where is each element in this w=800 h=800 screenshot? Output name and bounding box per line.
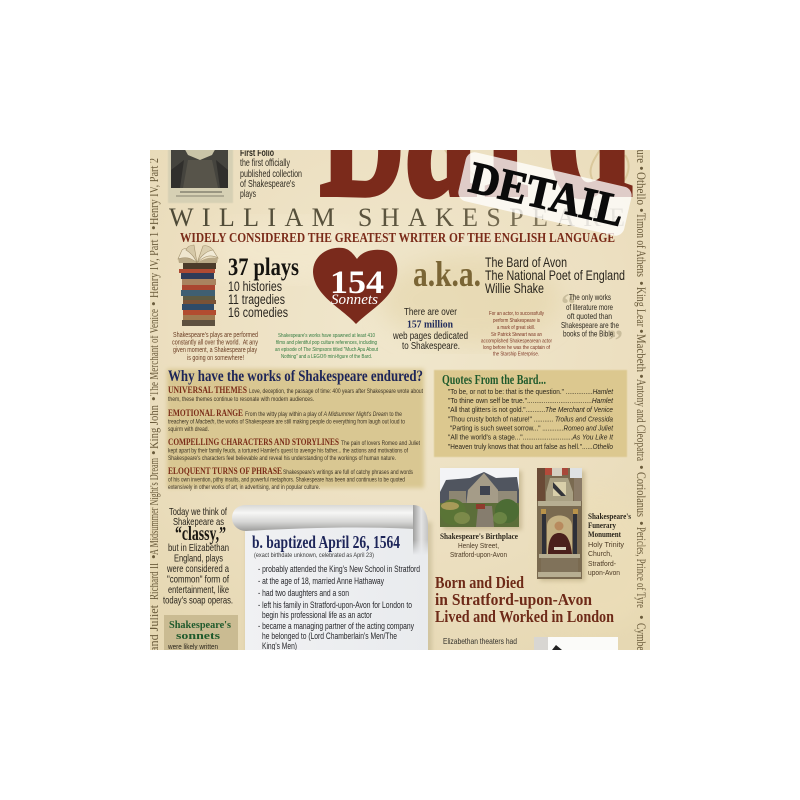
sidebar: right play titles: Antony and Cleopatra (634, 379, 649, 461)
panel: why the works endured: them, these themes continue to resonate with modern audiences. (168, 396, 314, 403)
sidebar: right play titles: • (634, 208, 649, 213)
image: Shakespeare's birthplace (440, 468, 522, 530)
panel: biography scroll: - became a managing partner of the acting company (258, 621, 414, 631)
sidebar: left play titles: A Midsummer Night's Dream (146, 458, 161, 555)
sidebar: left play titles (150, 158, 160, 650)
text: classy common entertainment: “classy,” (175, 523, 226, 545)
panel: why the works endured: Shakespeare's writings are full of catchy phrases and words (283, 469, 413, 476)
quote: most quoted literature: The only works (569, 293, 611, 302)
panel: why the works endured (167, 368, 424, 491)
icon: heart with 154 Sonnets: Sonnets (331, 292, 378, 308)
sidebar: right play titles: • (634, 329, 649, 334)
sidebar: left play titles: • (146, 450, 161, 455)
panel: why the works endured: extensively in other works of art, in advertising, and in popular culture. (168, 484, 320, 491)
panel: why the works endured: From the witty play within a play of A Midsummer Night's Dream to the (245, 411, 402, 418)
parchment background (150, 150, 660, 650)
text: Patrick Stewart note (481, 311, 552, 358)
text: birthplace caption: Stratford-upon-Avon (450, 552, 507, 559)
heading: William Shakespeare: WILLIAM SHAKESPEARE (169, 203, 625, 232)
text: classy common entertainment: Today we think of (169, 506, 227, 518)
panel: quotes from the Bard: "Thou crusty botch of nature!" ........... Troilus and Cressida (448, 414, 613, 424)
sidebar: left play titles: • (146, 301, 161, 306)
heading: born and died: Lived and Worked in London (435, 607, 614, 626)
text: classy common entertainment: "common" form of (167, 574, 229, 586)
sidebar: left play titles: Henry IV, Part 1 (146, 232, 161, 298)
panel: biography scroll: begin his professional life as an actor (262, 610, 372, 620)
text: pop culture references: an episode of The Simpsons titled "Much Apu About (275, 347, 378, 353)
quote: most quoted literature: of literature more (566, 303, 613, 312)
text: monument caption: Shakespeare's (588, 512, 631, 521)
panel: why the works endured: of his own invention, pithy insults, and powerful metaphors. Shakespeare has been and continues to be quoted (168, 476, 405, 484)
text: plays performed: is going on somewhere! (187, 355, 244, 362)
quote: most quoted literature: oft quoted than (567, 312, 612, 321)
sidebar: right play titles: Coriolanus (634, 472, 649, 517)
text: monument caption: Funerary (588, 521, 616, 530)
panel: biography scroll: - had two daughters and a son (258, 588, 349, 598)
quote: most quoted literature: ” (608, 324, 623, 357)
text: birthplace caption (440, 532, 518, 559)
sidebar: right play titles: • (634, 521, 649, 526)
heading: a.k.a.: a.k.a. (413, 254, 481, 294)
panel: quotes from the Bard: "All the world's a stage..."...........................As You Like It (448, 432, 614, 442)
stat: 37 plays: 10 histories (228, 279, 282, 294)
text: monument caption: Church, (588, 551, 612, 558)
sidebar: right play titles: • (634, 281, 649, 286)
sidebar: left play titles: • (146, 396, 161, 401)
panel: biography scroll (232, 505, 432, 662)
image: First Folio portrait (168, 146, 233, 203)
heading: quotes from the Bard: Quotes From the Bard... (442, 372, 546, 387)
icon: heart with 154 Sonnets (313, 248, 397, 324)
stat: 37 plays (228, 258, 298, 317)
stat: 157 million web pages: web pages dedicated (392, 330, 468, 342)
text: Elizabethan theaters: Elizabethan theaters had (443, 636, 517, 646)
icon: heart with 154 Sonnets: 154 (330, 265, 384, 301)
panel: quotes from the Bard: "To thine own self be true."...................................Hamlet (448, 396, 614, 405)
text: classy common entertainment: Shakepeare as (173, 516, 224, 528)
text: classy common entertainment: were considered a (166, 563, 229, 575)
text: First Folio caption: First Folio (240, 147, 274, 159)
sidebar: right play titles: Measure for Measure (634, 73, 649, 163)
sidebar: right play titles: Macbeth (634, 334, 649, 372)
text: Patrick Stewart note: a mark of great skill. (497, 325, 535, 331)
text: plays performed: Shakespeare's plays are performed (173, 332, 258, 339)
panel: biography scroll: King's Men) (262, 641, 297, 651)
sidebar: right play titles (634, 150, 646, 650)
sidebar: left play titles: Romeo and Juliet (146, 605, 161, 690)
sidebar: right play titles: Othello (634, 172, 649, 205)
text: Patrick Stewart note: perform Shakespeare is (493, 318, 540, 324)
text: Bard nicknames: Willie Shake (485, 280, 544, 296)
text: plays performed: constantly all over the world. At any (172, 340, 258, 346)
sidebar: left play titles: The Merchant of Venice (146, 309, 161, 396)
quote: most quoted literature (561, 294, 622, 340)
sidebar: right play titles: • (634, 374, 649, 379)
text: monument caption: Monument (588, 530, 621, 539)
panel: why the works endured: COMPELLING CHARACTERS AND STORYLINES (168, 438, 339, 448)
panel: why the works endured: treachery of Macbeth, the works of Shakespeare are still making people do everything from laugh out loud to (168, 418, 405, 426)
panel: quotes from the Bard: "All that glitters is not gold."...........The Merchant of Venice (448, 405, 613, 414)
panel: quotes from the Bard: "To be, or not to be: that is the question." ...............Hamlet (448, 387, 614, 396)
panel: quotes from the Bard (434, 370, 627, 457)
panel: sonnets note: sonnets (176, 630, 221, 642)
text: Patrick Stewart note: accomplished Shakespearean actor (481, 338, 552, 344)
panel: biography scroll: - at the age of 18, married Anne Hathaway (258, 576, 384, 586)
text: Patrick Stewart note: Sir Patrick Stewart was an (491, 332, 542, 338)
sidebar: right play titles: • (634, 166, 649, 171)
text: monument caption: upon-Avon (588, 570, 620, 577)
text: Patrick Stewart note: long before he was the captain of (483, 345, 550, 351)
quote: most quoted literature: Shakespeare are the (561, 321, 619, 330)
panel: why the works endured: The pain of lovers Romeo and Juliet (341, 440, 420, 447)
panel: why the works endured: UNIVERSAL THEMES (168, 386, 247, 396)
text: plays performed: given moment, a Shakespeare play (173, 347, 257, 354)
sidebar: right play titles: Pericles, Prince of Tyre (634, 527, 649, 608)
sidebar: right play titles: Timon of Athens (634, 213, 649, 277)
stat: 157 million web pages: There are over (404, 306, 457, 318)
icon: stack of books (178, 245, 218, 326)
stat: 157 million web pages: 157 million (407, 318, 453, 330)
text: classy common entertainment: but in Elizabethan (168, 542, 229, 554)
panel: sonnets note (164, 615, 238, 650)
stat: 157 million web pages: to Shakespeare. (402, 340, 460, 352)
text: Patrick Stewart note: For an actor, to successfully (489, 311, 544, 317)
decorative flourishes behind title (444, 150, 630, 184)
panel: biography scroll: (exact birthdate unknown, celebrated as April 23) (254, 552, 374, 559)
heading: why have the works endured: Why have the works of Shakespeare endured? (168, 368, 423, 385)
text: First Folio caption: published collection (240, 168, 302, 180)
stat: 37 plays: 11 tragedies (228, 292, 285, 307)
text: monument caption: Stratford- (588, 561, 617, 568)
title: Bard (320, 150, 633, 200)
sidebar: left play titles: Henry IV, Part 2 (146, 158, 161, 225)
sidebar: left play titles: • (146, 554, 161, 559)
sidebar: right play titles: King Lear (634, 287, 649, 328)
text: classy common entertainment: entertainment, like (168, 584, 229, 596)
panel: why the works endured: squirm with dread. (168, 426, 209, 433)
text: birthplace caption: Shakespeare's Birthplace (440, 532, 518, 541)
heading: baptized date: b. baptized April 26, 1564 (252, 532, 400, 552)
text: Bard nicknames: The Bard of Avon (485, 254, 567, 270)
panel: sonnets note: were likely written (167, 642, 218, 651)
heading: born and died: in Stratford-upon-Avon (435, 590, 592, 609)
heading: greatest writer subtitle: WIDELY CONSIDERED THE GREATEST WRITER OF THE ENGLISH LANGUAGE (180, 231, 615, 246)
image: theater illustration (534, 637, 618, 650)
text: pop culture references: films and plentiful pop culture references, including (276, 340, 377, 346)
sidebar: left play titles: King John (146, 405, 161, 449)
badge: DETAIL: DETAIL (465, 152, 629, 236)
text: monument caption (588, 512, 631, 577)
stat: 37 plays: 16 comedies (228, 305, 288, 320)
text: Patrick Stewart note: the Starship Enterprise. (493, 352, 539, 358)
text: pop culture references: Shakespeare's works have spawned at least 410 (278, 333, 375, 339)
text: classy common entertainment: today's soap operas. (163, 594, 233, 606)
text: Bard nicknames (485, 257, 624, 293)
sidebar: right play titles: • (634, 615, 649, 620)
text: First Folio caption: plays (240, 188, 256, 200)
quote: most quoted literature: books of the Bible. (563, 330, 615, 338)
text: First Folio caption (240, 147, 302, 200)
image: funerary monument (537, 468, 585, 581)
panel: sonnets note: Shakespeare's (169, 619, 232, 631)
panel: biography scroll: - left his family in Stratford-upon-Avon for London to (258, 600, 412, 610)
text: First Folio caption: the first officially (240, 157, 291, 169)
text: plays performed (172, 332, 258, 362)
text: First Folio caption: of Shakespeare's (240, 178, 295, 190)
panel: quotes from the Bard: "Heaven truly knows that thou art false as hell."......Othello (448, 442, 613, 451)
text: classy common entertainment (163, 506, 233, 606)
stat: 157 million web pages (392, 306, 468, 352)
sidebar: left play titles: Richard II (146, 563, 161, 600)
text: classy common entertainment: England, plays (174, 552, 223, 564)
text: pop culture references: Nothing" and a LEGO® mini-figure of the Bard. (281, 353, 372, 360)
panel: quotes from the Bard: "Parting is such sweet sorrow..." ............Romeo and Juliet (450, 424, 614, 432)
panel: biography scroll: - probably attended the King's New School in Stratford (258, 564, 420, 574)
heading: born and died (435, 576, 614, 622)
panel: why the works endured: EMOTIONAL RANGE (168, 409, 243, 419)
text: monument caption: Holy Trinity (588, 542, 625, 549)
quote: most quoted literature: “ (561, 288, 576, 321)
panel: why the works endured: ELOQUENT TURNS OF PHRASE (168, 467, 282, 477)
panel: why the works endured: Love, deception, the passage of time: 400 years after Shakespeare wrote about (249, 388, 423, 395)
sidebar: right play titles: Cymbeline (634, 623, 649, 665)
text: pop culture references (275, 333, 378, 360)
panel: why the works endured: kept apart by their family feuds, a tortured Hamlet's quest to avenge his father... the actions and motivations of (168, 448, 408, 454)
sidebar: right play titles: • (634, 465, 649, 470)
text: birthplace caption: Henley Street, (458, 543, 499, 550)
heading: born and died: Born and Died (435, 573, 524, 592)
panel: why the works endured: Shakespeare's characters feel believable and reveal his understanding of the workings of human nature. (168, 455, 396, 462)
stat: 37 plays: 37 plays (228, 254, 299, 281)
panel: biography scroll: he belonged to (Lord Chamberlain's Men/The (262, 631, 397, 641)
text: Bard nicknames: The National Poet of England (485, 267, 625, 283)
sidebar: left play titles: • (146, 225, 161, 230)
